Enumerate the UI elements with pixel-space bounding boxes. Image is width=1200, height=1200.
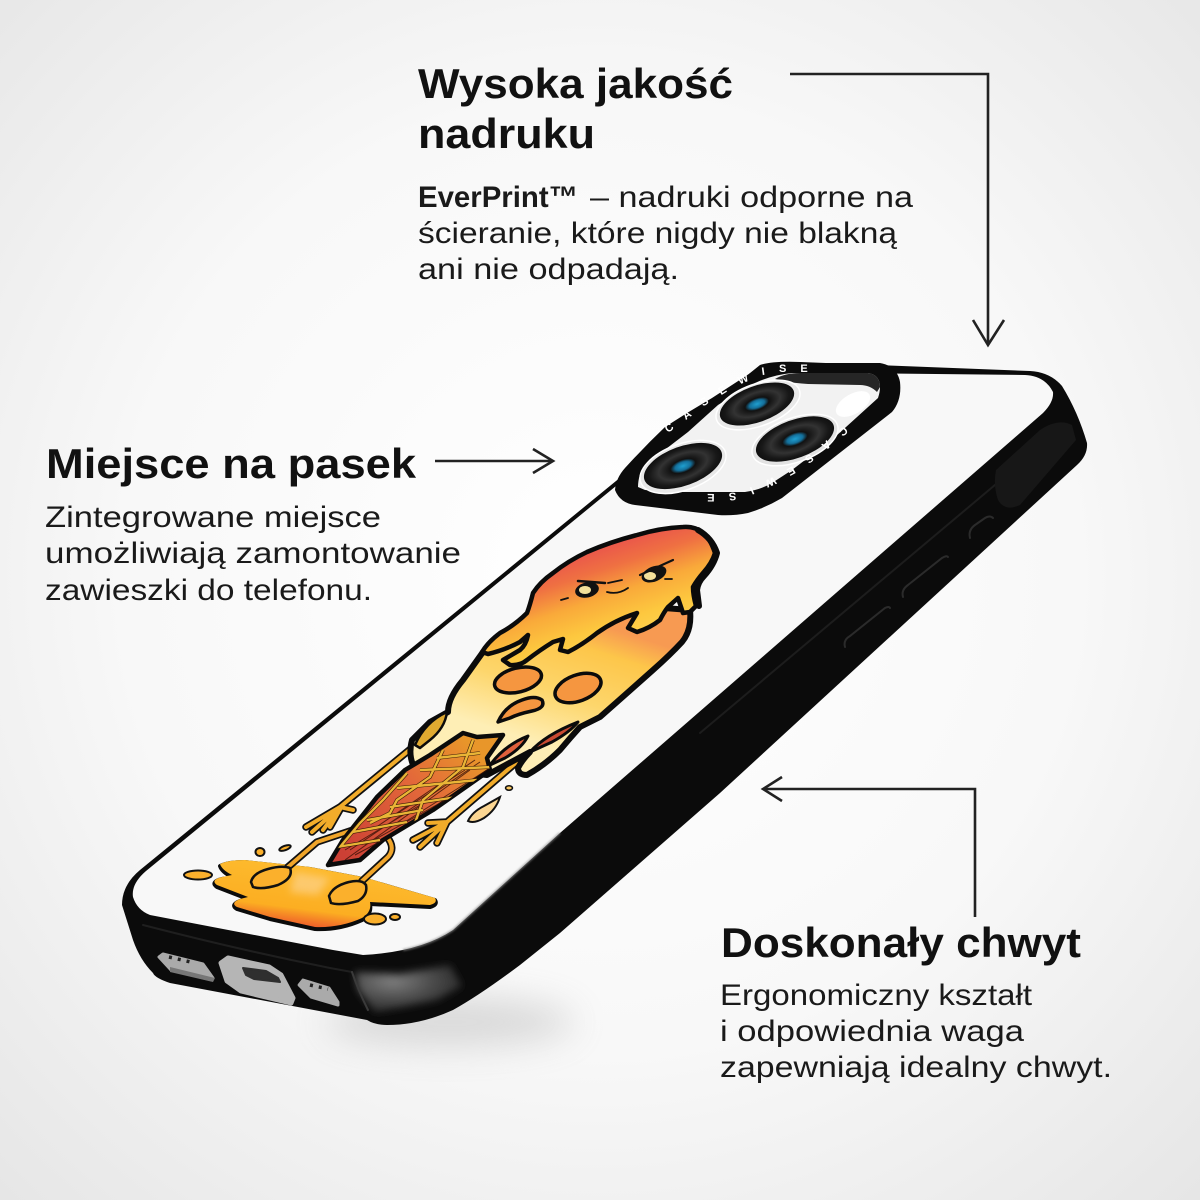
text block: print quality: ścieranie, które nigdy nie blakną (418, 217, 897, 250)
puddle shadow (214, 862, 436, 929)
drip droplet (468, 797, 500, 822)
drop shadow under phone (325, 998, 575, 1046)
case body (122, 362, 1087, 1025)
head right outline (697, 530, 717, 606)
melted body (410, 600, 690, 775)
lens right (745, 404, 845, 476)
face edge glow (403, 833, 560, 950)
feet (251, 867, 366, 904)
camera bump (615, 363, 900, 516)
ice cream head with drips (482, 527, 715, 665)
text block: grip (720, 979, 1112, 1084)
heading: print quality: nadruku (418, 110, 595, 157)
puddle highlight (290, 872, 330, 895)
flash (832, 386, 874, 422)
right arm (413, 748, 533, 847)
text block: grip: zapewniają idealny chwyt. (720, 1051, 1112, 1084)
text block: grip: Ergonomiczny kształt (720, 979, 1033, 1012)
charging port (221, 958, 293, 1003)
front white face (133, 372, 1053, 955)
left eye (574, 580, 605, 600)
side switch (995, 422, 1076, 508)
text block: strap slot: umożliwiają zamontowanie (45, 537, 461, 570)
bump frame (615, 363, 900, 515)
melted spots (492, 663, 605, 722)
waffle cone (328, 733, 503, 865)
text block: strap slot: zawieszki do telefonu. (45, 574, 372, 607)
text block: strap slot: Zintegrowane miejsce (45, 501, 381, 534)
lens left (633, 430, 733, 504)
brand text lower: CASEWISE (708, 428, 848, 502)
ice cream character artwork (184, 527, 717, 929)
mouth (561, 579, 672, 600)
left arm (306, 733, 430, 832)
bump opening (638, 373, 880, 492)
heading: print quality (418, 60, 733, 157)
heading: grip: Doskonały chwyt (721, 919, 1081, 966)
arm drip detail (415, 712, 447, 748)
side buttons (143, 453, 1033, 1010)
brand text upper: CASEWISE (665, 364, 808, 432)
text block: print quality: EverPrint™ (418, 181, 578, 214)
text block: print quality: ani nie odpadają. (418, 253, 679, 286)
right speaker grille (299, 980, 338, 1005)
phone case illustration (122, 362, 1087, 1025)
arrow: to side of case (763, 777, 975, 917)
heading: print quality: Wysoka jakość (418, 60, 733, 107)
text block: print quality (418, 181, 913, 286)
left speaker grille (159, 954, 215, 982)
legs (288, 830, 392, 881)
text block: print quality: – nadruki odporne na (590, 181, 913, 214)
bottom corner sheen (355, 965, 462, 1012)
heading: strap slot: Miejsce na pasek (46, 440, 417, 487)
arrow: to back of case (790, 74, 1004, 345)
small droplet (506, 786, 512, 790)
lens top (709, 370, 807, 440)
melt strips (490, 722, 578, 765)
inner top shadow (775, 373, 880, 392)
puddle drops (184, 844, 400, 924)
arrow: to strap slot (435, 449, 553, 473)
text block: strap slot (45, 501, 461, 607)
right eye (639, 560, 673, 586)
text block: grip: i odpowiednia waga (720, 1015, 1024, 1048)
puddle (214, 860, 436, 927)
